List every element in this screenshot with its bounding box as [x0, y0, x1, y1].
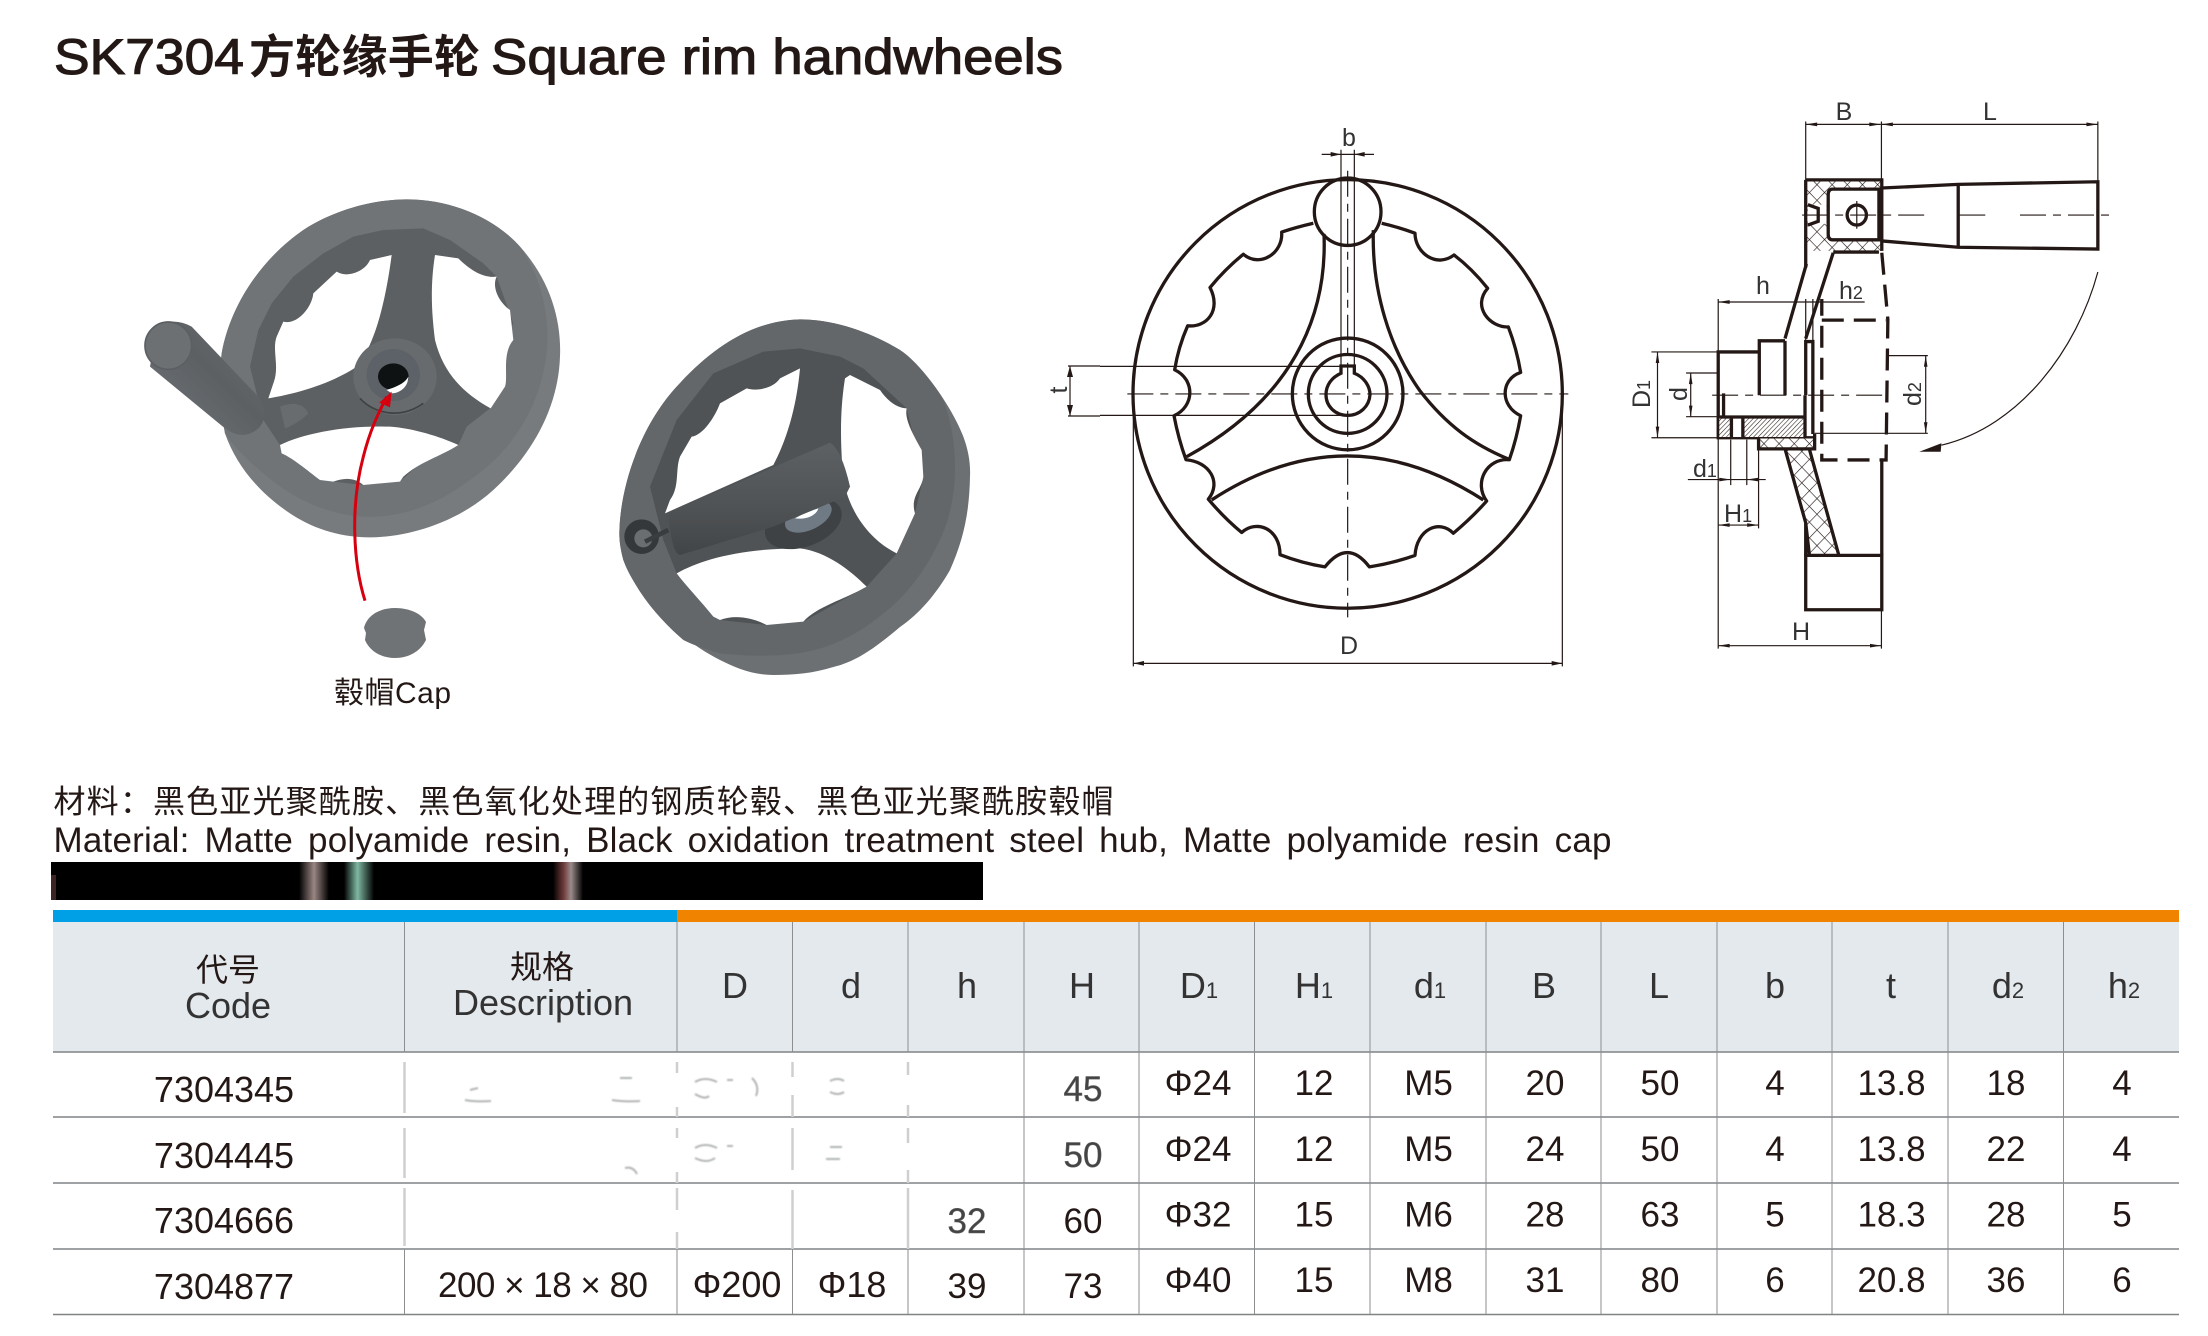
wheel rim side band	[619, 319, 970, 675]
photo: handwheel with handle at front	[619, 319, 970, 675]
header: dimension symbols: d2	[1992, 965, 2024, 1006]
blue header bar	[53, 910, 677, 922]
header: code	[185, 952, 271, 1026]
dimension lines	[1806, 121, 2098, 181]
red arrow	[355, 397, 387, 601]
header: dimension symbols: h	[957, 965, 977, 1006]
row 7304877: 7304877	[154, 1266, 294, 1307]
inner wall and spokes	[250, 228, 513, 485]
row 7304445: 4	[2112, 1130, 2132, 1169]
header: code: Code	[185, 985, 271, 1026]
title	[54, 29, 1063, 85]
row 7304345	[154, 1064, 2132, 1110]
row 7304877	[154, 1261, 2132, 1307]
title: SK7304	[54, 29, 244, 85]
wheel face	[220, 199, 547, 517]
label D: D	[1340, 632, 1358, 660]
material text chinese: 材料：黑色亚光聚酰胺、黑色氧化处理的钢质轮毂、黑色亚光聚酰胺毂帽	[54, 784, 1114, 820]
keyway	[1326, 366, 1370, 415]
D dimension	[1133, 406, 1562, 666]
row 7304877: 73	[1064, 1267, 1102, 1306]
upper right window	[841, 375, 923, 553]
inner wall and spokes	[650, 348, 923, 625]
bottom window	[280, 426, 458, 485]
row 7304445: M5	[1404, 1130, 1453, 1169]
row 7304666	[154, 1196, 2132, 1241]
side view labels: h	[1756, 272, 1770, 300]
centre line	[1712, 394, 1884, 396]
row 7304877: Φ40	[1165, 1261, 1231, 1300]
side view labels: d2	[1899, 382, 1927, 406]
cap disc	[364, 608, 426, 658]
dimension arrows	[1656, 123, 2098, 648]
row 7304445: 50	[1064, 1136, 1102, 1175]
title: 方轮缘手轮	[249, 31, 480, 83]
row 7304877: 39	[948, 1267, 986, 1306]
row 7304877: 80	[1641, 1261, 1679, 1300]
row 7304877: 15	[1295, 1261, 1333, 1300]
side view labels: H	[1792, 618, 1810, 646]
row 7304345: M5	[1404, 1064, 1453, 1103]
side view labels: d1	[1693, 455, 1717, 483]
handle end circle	[1314, 178, 1381, 245]
row 7304666: 60	[1064, 1202, 1102, 1241]
header: dimension symbols: B	[1532, 965, 1556, 1006]
header: dimension symbols: d	[841, 965, 861, 1006]
side view labels: L	[1983, 98, 1997, 126]
row 7304345: 18	[1987, 1064, 2025, 1103]
row 7304445: Φ24	[1165, 1130, 1231, 1169]
spoke highlight	[280, 404, 308, 428]
grid lines	[53, 922, 2179, 1314]
front view drawing	[1100, 150, 1568, 666]
redaction bar	[51, 862, 983, 900]
handle	[150, 322, 264, 435]
handle	[1882, 182, 2098, 249]
header: dimension symbols	[722, 965, 2140, 1006]
header: dimension symbols: h2	[2108, 965, 2140, 1006]
row 7304445	[154, 1130, 2132, 1176]
row 7304666: M6	[1404, 1196, 1453, 1234]
row 7304877: 36	[1987, 1261, 2025, 1300]
row 7304445: 22	[1987, 1130, 2025, 1169]
row 7304345: 7304345	[154, 1069, 294, 1110]
row 7304345: 13.8	[1857, 1064, 1926, 1103]
title: Square rim handwheels	[491, 29, 1063, 85]
row 7304445: 13.8	[1857, 1130, 1926, 1169]
header: dimension symbols: H	[1069, 965, 1095, 1006]
hub	[353, 338, 437, 415]
hub rings	[1292, 338, 1403, 450]
header: dimension symbols: d1	[1414, 965, 1446, 1006]
scalloped inner rim	[1174, 223, 1521, 567]
row 7304666: 7304666	[154, 1200, 294, 1241]
orange header bar	[677, 910, 2179, 922]
header: dimension symbols: L	[1649, 965, 1669, 1006]
row 7304666: 32	[948, 1202, 986, 1241]
row 7304445: 4	[1765, 1130, 1785, 1169]
wheel face	[619, 319, 955, 656]
row 7304877: 20.8	[1857, 1261, 1926, 1300]
header: description	[453, 949, 633, 1023]
header: code: 代号	[196, 952, 260, 988]
upper left window	[665, 368, 800, 513]
handle	[668, 443, 850, 555]
header: dimension symbols: D1	[1180, 965, 1218, 1006]
lower rim	[1806, 555, 1882, 610]
row 7304445: 24	[1526, 1130, 1564, 1169]
header background	[53, 922, 2179, 1052]
row 7304666: 28	[1987, 1196, 2025, 1234]
row 7304877: 31	[1526, 1261, 1564, 1300]
row 7304445: 7304445	[154, 1135, 294, 1176]
row 7304666: Φ32	[1165, 1196, 1231, 1234]
header: description: Description	[453, 982, 633, 1023]
row 7304877: 6	[2112, 1261, 2132, 1300]
rim section hatch	[1806, 180, 1882, 251]
row 7304345: 20	[1526, 1064, 1564, 1103]
row 7304666: 28	[1526, 1196, 1564, 1234]
row 7304345: Φ24	[1165, 1064, 1231, 1103]
rim section outline	[1806, 180, 1882, 268]
material text english: Material: Matte polyamide resin, Black oxidation treatment steel hub, Matte polyamide resin cap	[54, 821, 1612, 860]
upper left window	[268, 255, 392, 398]
eyelet	[624, 519, 659, 554]
row 7304345: 50	[1641, 1064, 1679, 1103]
row 7304877: M8	[1404, 1261, 1453, 1300]
side view labels: H1	[1724, 500, 1752, 528]
t dimension	[1045, 366, 1100, 416]
header: dimension symbols: D	[722, 965, 748, 1006]
row 7304666: 63	[1641, 1196, 1679, 1234]
side view labels: D1	[1628, 380, 1656, 408]
hub section hatch	[1719, 418, 1805, 437]
centre lines	[1347, 171, 1349, 617]
row 7304877: Φ200	[693, 1264, 781, 1305]
cap label: 毂帽Cap	[334, 677, 451, 710]
wheel rim side band	[220, 199, 560, 537]
row 7304345: 12	[1295, 1064, 1333, 1103]
spokes	[1187, 230, 1508, 500]
faded cell remnants	[465, 1078, 844, 1174]
rotation arc	[1941, 272, 2098, 445]
lower spoke hatch	[1759, 438, 1839, 554]
row 7304345: 4	[2112, 1064, 2132, 1103]
row 7304345: 4	[1765, 1064, 1785, 1103]
bottom window	[677, 548, 867, 625]
row 7304666: 15	[1295, 1196, 1333, 1234]
row 7304345: 45	[1064, 1070, 1102, 1109]
row 7304877: 200 × 18 × 80	[438, 1266, 648, 1305]
outer circle	[1133, 180, 1562, 608]
row 7304445: 12	[1295, 1130, 1333, 1169]
header: dimension symbols: b	[1765, 965, 1785, 1006]
header: dimension symbols: t	[1886, 965, 1896, 1006]
side view labels: d	[1665, 387, 1693, 401]
hub cap	[364, 608, 426, 658]
row 7304877: Φ18	[818, 1264, 886, 1305]
hub outline	[1718, 341, 1815, 438]
slot lines	[1322, 150, 1374, 366]
row 7304445: 50	[1641, 1130, 1679, 1169]
side section drawing	[1651, 121, 2111, 649]
row 7304877: 6	[1765, 1261, 1785, 1300]
row 7304666: 18.3	[1857, 1196, 1926, 1234]
header: dimension symbols: H1	[1295, 965, 1333, 1006]
upper right window	[432, 255, 513, 408]
row 7304666: 5	[1765, 1196, 1785, 1234]
dashed folded handle	[1822, 253, 1888, 460]
hub peek	[758, 488, 849, 559]
header: description: 规格	[510, 949, 574, 985]
pin hole	[1847, 205, 1866, 225]
photo: handwheel with handle at left and hub cap arrow	[145, 199, 560, 601]
label b: b	[1342, 124, 1356, 152]
side view labels	[1628, 98, 1997, 646]
side view labels: B	[1836, 98, 1852, 126]
spoke upper	[1785, 253, 1833, 339]
row 7304666: 5	[2112, 1196, 2132, 1234]
specification table	[53, 910, 2179, 1314]
side view labels: h2	[1839, 277, 1863, 305]
t dimension: t	[1045, 386, 1073, 393]
